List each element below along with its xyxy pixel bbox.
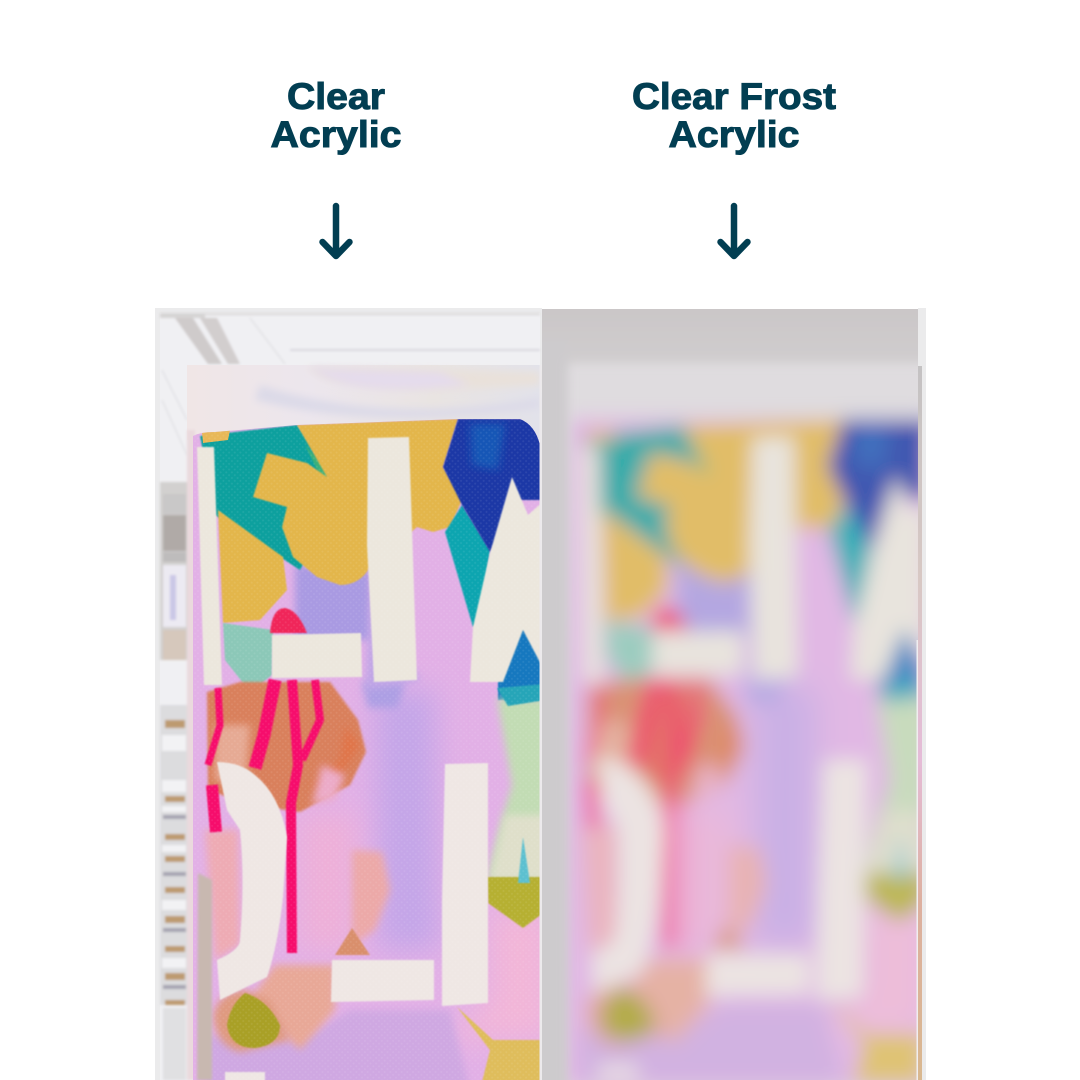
heading: Clear Acrylic: Clear	[287, 76, 385, 117]
heading: Clear Frost Acrylic	[632, 76, 836, 155]
frost cover above art	[836, 408, 918, 435]
inner acrylic block above canvas	[187, 365, 540, 440]
panel: clear frost acrylic sample	[530, 295, 940, 1080]
painting: blurred through frost	[530, 295, 940, 1080]
acrylic top edge reflections	[160, 313, 540, 455]
heading: Clear Acrylic	[270, 76, 402, 155]
panel: clear acrylic sample	[155, 308, 555, 1080]
heading: Clear Acrylic: Acrylic	[270, 114, 402, 155]
heading: Clear Frost Acrylic: Acrylic	[668, 114, 800, 155]
left edge ridges	[160, 430, 212, 1080]
acrylic tan edge	[197, 873, 212, 1080]
frost top edge and left edge	[530, 295, 930, 1080]
painting: seen through clear acrylic	[185, 415, 555, 1080]
heading: Clear Frost Acrylic: Clear Frost	[632, 76, 836, 117]
arrow: down to clear acrylic	[322, 206, 350, 256]
arrow: down to frost acrylic	[720, 206, 748, 256]
